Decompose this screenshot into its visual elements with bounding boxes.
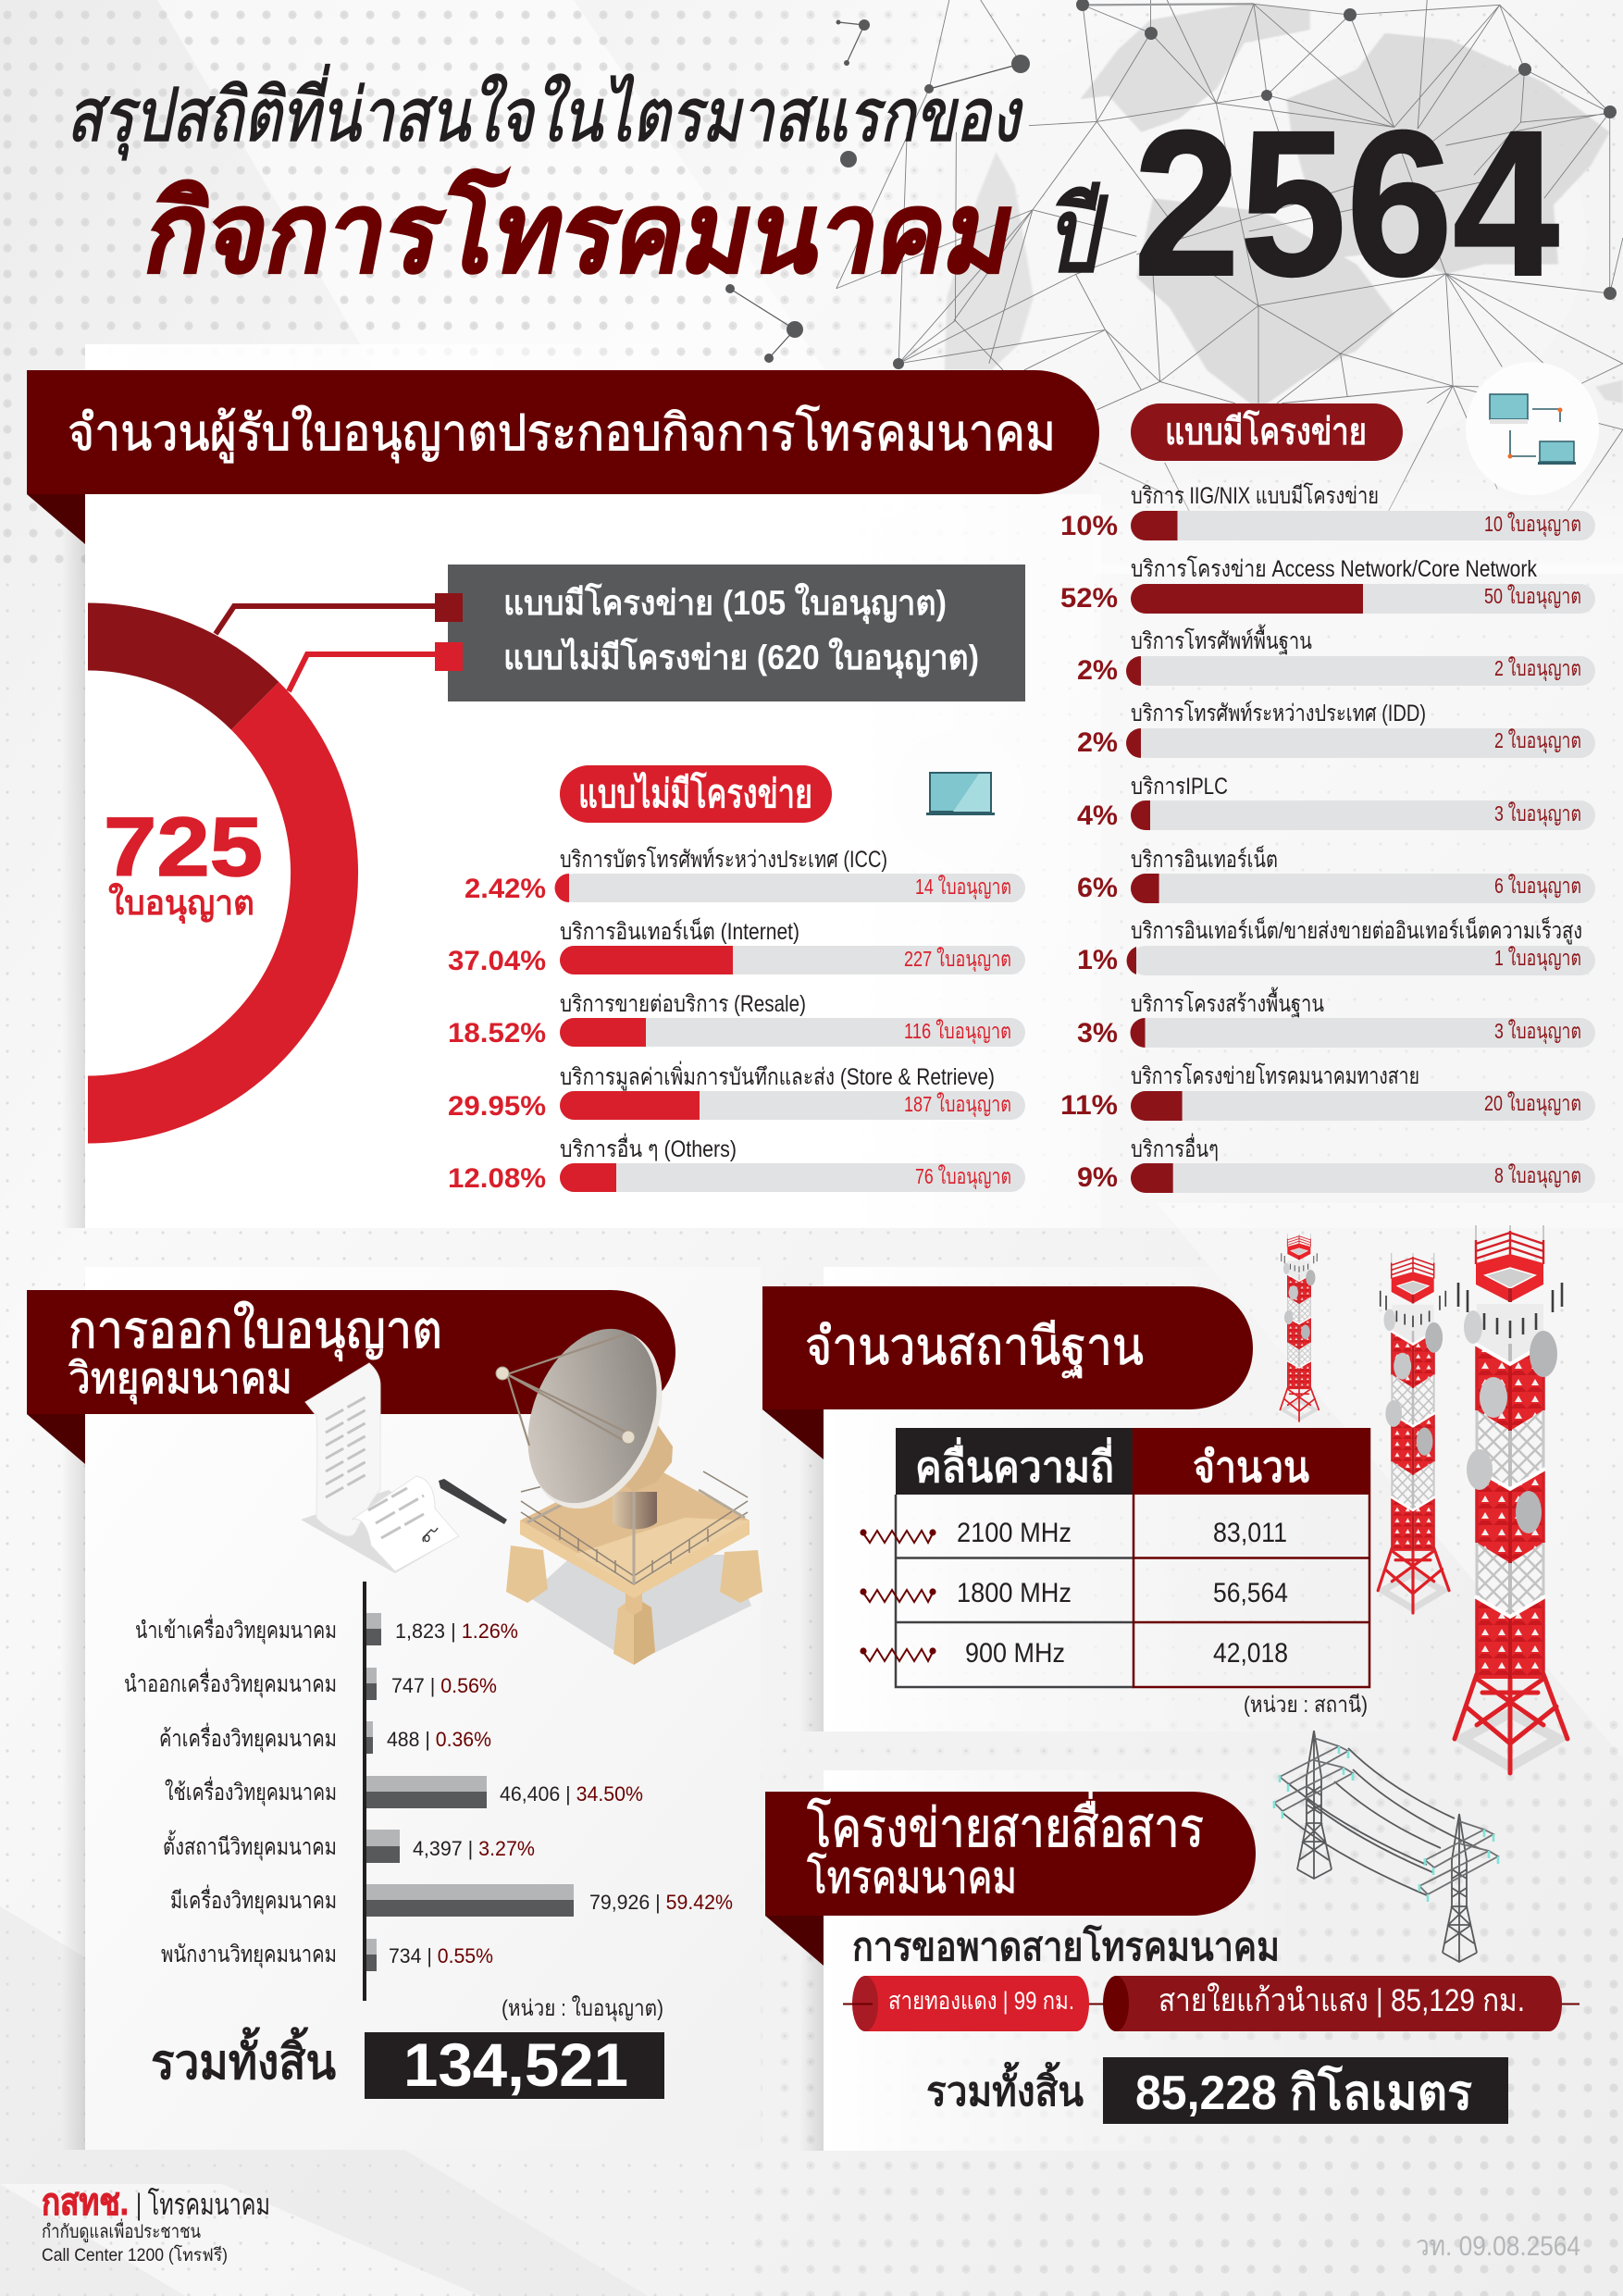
table: frequencies: คลื่นความถี่ — [915, 1437, 1114, 1491]
bar row: Internet — [448, 917, 1025, 976]
bar row: Internet: 6% — [1077, 873, 1118, 903]
heading band: จำนวนผู้รับใบอนุญาตประกอบกิจการโทรคมนาคม — [68, 404, 1056, 464]
column — [613, 1492, 657, 1529]
legend box — [216, 565, 1025, 701]
row: operators: 734 | 0.55% — [389, 1944, 493, 1967]
world map and network graphic — [725, 0, 1623, 574]
network nodes — [725, 0, 1617, 369]
table: frequencies: 42,018 — [1213, 1638, 1288, 1669]
bar row: Access Network: 50 ใบอนุญาต — [1484, 584, 1581, 609]
row: possession — [170, 1884, 733, 1917]
bar row: ICC: 2.42% — [465, 874, 546, 904]
bar row: Access Network: บริการโครงข่าย Access Network/Core Network — [1131, 555, 1537, 582]
tagline: กำกับดูแลเพื่อประชาชน — [42, 2218, 201, 2243]
subheading: การขอพาดสายโทรคมนาคม — [852, 1924, 1280, 1968]
bar row: IPLC: บริการIPLC — [1131, 774, 1228, 800]
heading band — [762, 1286, 1253, 1459]
icon: document and pen — [301, 1363, 507, 1573]
bar row: wired network: บริการโครงข่ายโทรคมนาคมทางสาย — [1131, 1062, 1419, 1089]
legend box: แบบมีโครงข่าย (105 ใบอนุญาต) — [503, 582, 947, 625]
row: import: นำเข้าเครื่องวิทยุคมนาคม — [135, 1614, 337, 1644]
donut total: 725 — [104, 801, 263, 894]
fibre cable: สายใยแก้วนำแสง | 85,129 กม. — [1158, 1982, 1525, 2018]
table: frequencies — [896, 1428, 1369, 1687]
bar row: IIG/NIX: 10% — [1060, 511, 1118, 541]
bar row: IPLC — [1077, 774, 1595, 831]
icon: laptop — [891, 729, 1024, 863]
pill heading: แบบมีโครงข่าย — [1165, 410, 1367, 453]
title line 2: กิจการโทรคมนาคม — [136, 168, 1027, 295]
bar row: Others — [448, 1133, 1025, 1194]
pill heading: แบบไม่มีโครงข่าย — [578, 771, 812, 815]
cable diagram — [843, 1976, 1580, 2031]
row: possession: มีเครื่องวิทยุคมนาคม — [170, 1884, 337, 1915]
bar row: Internet: 6 ใบอนุญาต — [1494, 874, 1581, 899]
bar row: Internet — [1077, 845, 1595, 903]
bar row: Resale: บริการขายต่อบริการ (Resale) — [560, 991, 806, 1017]
row: possession: 79,926 | 59.42% — [589, 1891, 733, 1914]
bar chart: radio licences — [124, 1582, 733, 2001]
bar row: Resale: 18.52% — [448, 1018, 546, 1049]
bar row: Others: 76 ใบอนุญาต — [915, 1164, 1011, 1189]
panel: radio licences — [27, 1267, 762, 2150]
fibre cable — [1103, 1976, 1562, 2031]
icon: signal wave 2100 — [860, 1529, 936, 1543]
pill heading — [560, 765, 832, 823]
icon: large tower — [1455, 1225, 1567, 1773]
bar row: IDD: 2% — [1077, 727, 1118, 758]
total value — [1103, 2057, 1508, 2124]
row: trade: 488 | 0.36% — [387, 1728, 491, 1751]
bar row: Internet: 37.04% — [448, 946, 546, 976]
bar row: fixed line: 2 ใบอนุญาต — [1494, 656, 1581, 681]
icon: satellite dish on platform — [496, 1309, 762, 1665]
bar row: Others: บริการอื่น ๆ (Others) — [560, 1133, 737, 1162]
panel: base stations — [762, 1225, 1567, 1773]
icon: signal wave 1800 — [860, 1588, 936, 1602]
panel: without network — [448, 729, 1025, 1194]
department: | โทรคมนาคม — [136, 2188, 270, 2221]
pill heading — [1131, 403, 1403, 461]
bar row: Others: 12.08% — [448, 1163, 546, 1194]
bar row: others: 9% — [1077, 1162, 1118, 1193]
heading band — [27, 370, 1099, 544]
copper cable: สายทองแดง | 99 กม. — [888, 1987, 1074, 2015]
row: import — [135, 1613, 518, 1645]
fade of the network into the page — [1092, 453, 1623, 574]
bar row: infrastructure: บริการโครงสร้างพื้นฐาน — [1131, 987, 1324, 1017]
total label: รวมทั้งสิ้น — [926, 2061, 1084, 2115]
icon: transmission pylons — [1274, 1731, 1498, 1962]
table: frequencies: 56,564 — [1213, 1578, 1288, 1608]
row: station — [163, 1830, 535, 1863]
row: import: 1,823 | 1.26% — [395, 1620, 518, 1643]
bar row: fixed line: 2% — [1077, 655, 1118, 686]
row: operators: พนักงานวิทยุคมนาคม — [161, 1942, 337, 1968]
row: use: ใช้เครื่องวิทยุคมนาคม — [165, 1776, 337, 1806]
bar row: others: 8 ใบอนุญาต — [1494, 1163, 1581, 1188]
table: frequencies: จำนวน — [1193, 1443, 1309, 1491]
bar row: Access Network: 52% — [1060, 583, 1118, 614]
heading band: วิทยุคมนาคม — [68, 1354, 292, 1405]
bar row: IIG/NIX: บริการ IIG/NIX แบบมีโครงข่าย — [1131, 482, 1379, 509]
bar row: infrastructure: 3% — [1077, 1018, 1118, 1049]
icon: medium tower — [1378, 1253, 1449, 1613]
heading band: โทรคมนาคม — [807, 1852, 1017, 1903]
bar row: high speed internet — [1077, 916, 1595, 975]
row: export: 747 | 0.56% — [391, 1674, 497, 1697]
bar row: IDD: บริการโทรศัพท์ระหว่างประเทศ (IDD) — [1131, 700, 1426, 726]
table: frequencies: 2100 MHz — [957, 1518, 1072, 1548]
bar row: IPLC: 4% — [1077, 800, 1118, 831]
title year label: ปี — [1038, 178, 1116, 293]
bar row: fixed line: บริการโทรศัพท์พื้นฐาน — [1131, 624, 1312, 654]
bar row: Internet: บริการอินเทอร์เน็ต — [1131, 845, 1278, 873]
title — [63, 64, 1559, 319]
row: trade: ค้าเครื่องวิทยุคมนาคม — [159, 1722, 337, 1753]
bar row: IIG/NIX — [1060, 482, 1595, 541]
heading band: โครงข่ายสายสื่อสาร — [807, 1791, 1204, 1858]
unit note: (หน่วย : ใบอนุญาต) — [502, 1995, 663, 2022]
row: trade — [159, 1721, 491, 1754]
bar row: others: บริการอื่นๆ — [1131, 1133, 1219, 1162]
bar row: Store and Retrieve — [448, 1061, 1025, 1122]
table: frequencies: 900 MHz — [965, 1638, 1065, 1669]
dish — [505, 1311, 687, 1528]
platform top — [520, 1459, 750, 1585]
bar row: IIG/NIX: 10 ใบอนุญาต — [1484, 512, 1581, 537]
heading band — [27, 1290, 675, 1464]
icon: small tower — [1280, 1234, 1319, 1421]
bar row: others — [1077, 1133, 1595, 1193]
copper cable — [843, 1976, 1089, 2031]
heading band: จำนวนสถานีฐาน — [805, 1317, 1144, 1377]
logo: กสทช. — [42, 2182, 129, 2223]
panel: licensees — [27, 344, 1623, 1228]
icon: network computers — [1466, 362, 1599, 495]
bar row: IDD: 2 ใบอนุญาต — [1494, 728, 1581, 753]
row: use — [165, 1776, 643, 1808]
platform legs — [506, 1545, 548, 1603]
bar row: Resale — [448, 991, 1025, 1049]
table: frequencies: 1800 MHz — [957, 1578, 1072, 1608]
donut unit: ใบอนุญาต — [108, 882, 254, 925]
icon: signal wave 900 — [860, 1647, 936, 1661]
bar row: Access Network — [1060, 555, 1595, 614]
footer: logo and contact — [42, 2182, 270, 2265]
total label: รวมทั้งสิ้น — [151, 2027, 336, 2090]
row: export: นำออกเครื่องวิทยุคมนาคม — [124, 1668, 337, 1698]
bar row: ICC: บริการบัตรโทรศัพท์ระหว่างประเทศ (ICC) — [560, 846, 887, 873]
bar row: Store and Retrieve: บริการมูลค่าเพิ่มการบันทึกและส่ง (Store & Retrieve) — [560, 1061, 995, 1091]
bar row: Store and Retrieve: 187 ใบอนุญาต — [904, 1092, 1011, 1117]
bar row: ICC — [465, 846, 1025, 904]
bar row: Store and Retrieve: 29.95% — [448, 1091, 546, 1122]
bar row: ICC: 14 ใบอนุญาต — [915, 875, 1011, 900]
bar row: IDD — [1077, 700, 1595, 758]
row: operators — [161, 1939, 493, 1971]
bar row: Resale: 116 ใบอนุญาต — [904, 1019, 1011, 1044]
bar row: wired network — [1060, 1062, 1595, 1121]
bar row: Internet: บริการอินเทอร์เน็ต (Internet) — [560, 917, 799, 945]
total value: 85,228 กิโลเมตร — [1135, 2064, 1472, 2120]
panel: cable network — [765, 1731, 1580, 2151]
row: station: ตั้งสถานีวิทยุคมนาคม — [163, 1830, 337, 1861]
unit note: (หน่วย : สถานี) — [1244, 1693, 1368, 1718]
call center: Call Center 1200 (โทรฟรี) — [42, 2244, 228, 2265]
donut chart — [88, 603, 358, 1144]
bar row: wired network: 11% — [1060, 1090, 1118, 1121]
row: use: 46,406 | 34.50% — [500, 1782, 643, 1806]
bar row: high speed internet: 1 ใบอนุญาต — [1494, 946, 1581, 971]
title line 1: สรุปสถิติที่น่าสนใจในไตรมาสแรกของ — [63, 64, 1035, 160]
total value: 134,521 — [403, 2030, 628, 2099]
row: export — [124, 1668, 497, 1700]
panel: with network — [1060, 362, 1599, 1193]
railing — [521, 1471, 748, 1584]
heading band: การออกใบอนุญาต — [68, 1300, 442, 1361]
bar row: wired network: 20 ใบอนุญาต — [1484, 1091, 1581, 1116]
globe landmasses — [836, 0, 1623, 518]
legend box: แบบไม่มีโครงข่าย (620 ใบอนุญาต) — [503, 637, 979, 679]
bar row: Internet: 227 ใบอนุญาต — [904, 947, 1011, 972]
bar row: high speed internet: 1% — [1077, 945, 1118, 975]
bar row: infrastructure: 3 ใบอนุญาต — [1494, 1019, 1581, 1044]
row: station: 4,397 | 3.27% — [413, 1837, 535, 1860]
heading band — [765, 1791, 1256, 1966]
bar row: infrastructure — [1077, 987, 1595, 1049]
bar row: fixed line — [1077, 624, 1595, 686]
title year: 2564 — [1134, 88, 1559, 319]
credit date: วท. 09.08.2564 — [1416, 2231, 1580, 2262]
network lines — [836, 0, 1623, 518]
bar row: IPLC: 3 ใบอนุญาต — [1494, 801, 1581, 826]
table: frequencies: 83,011 — [1213, 1518, 1287, 1548]
